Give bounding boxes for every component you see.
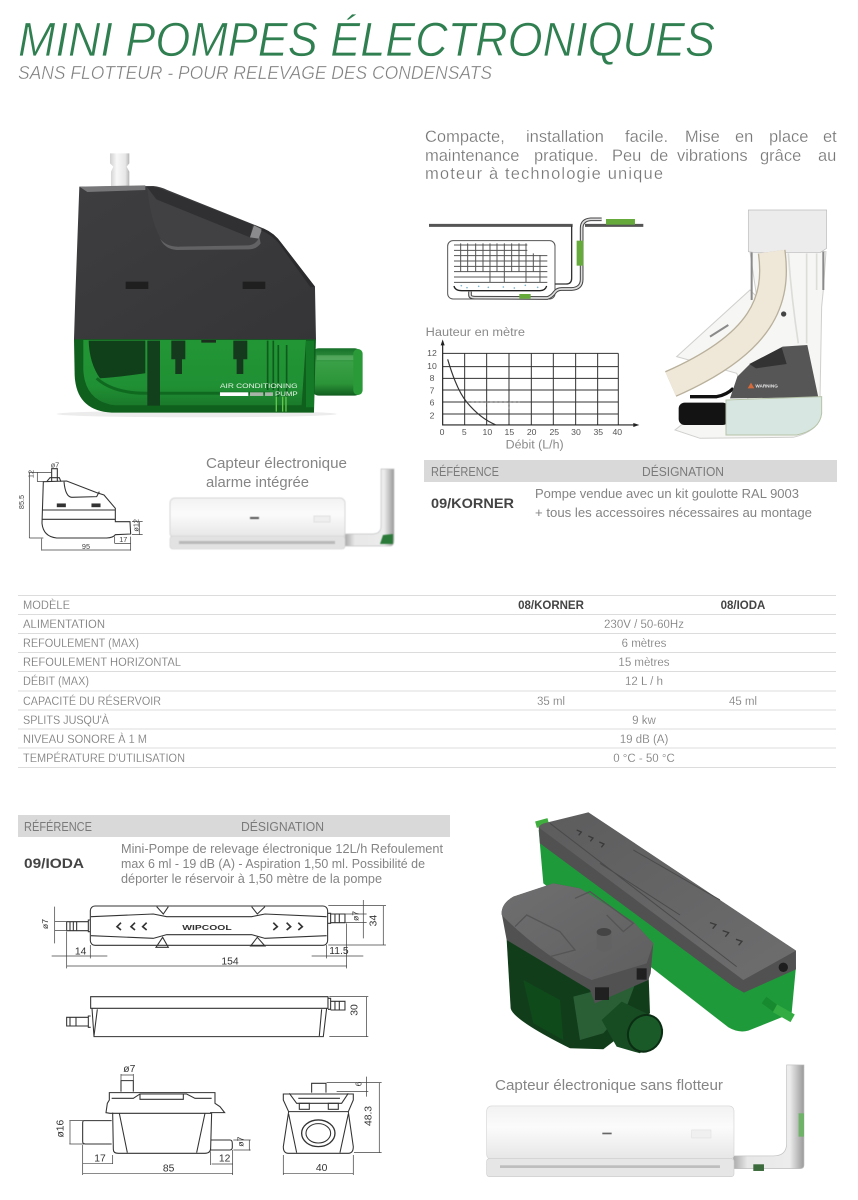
green joints — [753, 1113, 804, 1171]
row: niveau sonore — [23, 733, 668, 746]
x labels: 20 — [527, 427, 537, 437]
designation: Mini-Pompe de relevage électronique 12L/h Refoulement — [121, 842, 444, 856]
header labels: DÉSIGNATION — [241, 819, 324, 834]
end view dimensions — [283, 1077, 382, 1175]
x labels: 10 — [483, 427, 492, 437]
caption: capteur Korner — [206, 455, 347, 491]
front view values: ø7 — [235, 1136, 245, 1147]
front view values: 12 — [219, 1154, 231, 1165]
row: splits: SPLITS JUSQU'À — [23, 714, 109, 727]
intro text block: Peu — [612, 147, 641, 165]
product photo: Ioda pumps — [502, 812, 796, 1057]
row: capacité: 35 ml — [537, 696, 565, 708]
clips — [595, 987, 609, 1000]
intro text block: grâce — [760, 147, 801, 165]
intro text block: en — [735, 128, 753, 146]
pump lettering: PUMP — [275, 391, 298, 398]
y labels: 2 — [430, 411, 435, 421]
row: modèle: MODÈLE — [23, 599, 70, 612]
reference: 09/IODA — [24, 855, 84, 871]
dimension values: 95 — [82, 542, 90, 551]
chart title: Hauteur en mètre — [426, 325, 525, 339]
long green reservoir pump — [536, 812, 796, 1031]
row: alimentation — [23, 619, 684, 631]
technical drawings: Ioda — [40, 900, 386, 1175]
intro text block: facile. — [625, 128, 668, 146]
top view values: ø7 — [40, 919, 50, 929]
specifications table — [18, 596, 836, 768]
left nozzle — [536, 821, 548, 825]
designation: Pompe vendue avec un kit goulotte RAL 9003 — [535, 487, 799, 501]
row: refoulement max: REFOULEMENT (MAX) — [23, 638, 139, 650]
row: température — [23, 752, 675, 765]
header band — [18, 815, 450, 837]
top view dimensions — [52, 900, 386, 968]
header labels — [431, 464, 724, 479]
dimension values: ø12 — [132, 519, 141, 532]
white duct cover — [748, 210, 827, 253]
sensor — [380, 534, 393, 544]
caption: capteur Korner: Capteur électronique — [206, 455, 347, 472]
beige sleeve — [671, 252, 773, 384]
end view values — [316, 1081, 374, 1174]
top view values — [40, 911, 380, 968]
y labels — [427, 348, 437, 421]
ceiling — [429, 221, 643, 230]
photo: air conditioner Ioda — [487, 1065, 804, 1177]
center outlet — [597, 928, 612, 952]
pump housing: WARNING — [755, 384, 778, 389]
front view values: ø16 — [55, 1119, 66, 1138]
front view — [83, 1081, 232, 1153]
row: température: 0 °C - 50 °C — [613, 753, 675, 765]
x labels: 30 — [571, 427, 581, 437]
x labels: 5 — [462, 427, 467, 437]
pump lettering — [220, 383, 298, 398]
row: débit: 12 L / h — [625, 676, 663, 688]
intro text block — [425, 128, 837, 183]
intro text block: de — [650, 147, 668, 165]
dimension lines — [29, 472, 143, 551]
x labels: 25 — [549, 427, 559, 437]
row: niveau sonore: 19 dB (A) — [620, 734, 668, 746]
row: splits: 9 kw — [632, 715, 657, 727]
outlet — [602, 1002, 663, 1053]
end view values: 48.3 — [363, 1106, 374, 1126]
axes — [441, 339, 639, 427]
unit — [170, 498, 345, 538]
intro text block: au — [818, 147, 836, 165]
long pump lid — [539, 812, 796, 993]
row: refoulement horizontal — [23, 657, 670, 669]
front view values: ø7 — [123, 1064, 136, 1075]
dimension values: 12 — [26, 470, 35, 478]
front view values: 85 — [163, 1163, 175, 1174]
green pump markers — [519, 219, 635, 299]
y labels: 7 — [430, 385, 435, 395]
row: température: TEMPÉRATURE D'UTILISATION — [23, 752, 185, 765]
intro text block: installation — [526, 128, 604, 146]
dimension drawing: Korner — [17, 460, 143, 551]
row: modèle: 08/IODA — [721, 600, 765, 612]
Korner reference table — [424, 460, 837, 520]
flow chart — [426, 325, 639, 452]
header labels: DÉSIGNATION — [642, 464, 724, 479]
row: refoulement max — [23, 638, 667, 650]
curve — [448, 359, 496, 425]
intro text block: et — [823, 128, 837, 146]
row: capacité: 45 ml — [729, 696, 757, 708]
row: capacité: CAPACITÉ DU RÉSERVOIR — [23, 695, 161, 708]
x labels: 15 — [505, 427, 514, 437]
row: modèle — [23, 599, 765, 612]
dashed reference — [467, 402, 520, 409]
dimension values: ø7 — [51, 460, 59, 469]
housing — [74, 186, 316, 339]
pipes — [470, 219, 602, 298]
side view — [67, 997, 345, 1037]
intro text block: pratique. — [534, 147, 598, 165]
compact pump — [502, 883, 668, 1057]
photo: air conditioner Korner — [170, 469, 394, 549]
title: MINI POMPES ÉLECTRONIQUES — [18, 14, 715, 67]
top view values: 34 — [369, 915, 380, 926]
outline — [42, 469, 131, 538]
top view values: 11.5 — [329, 946, 349, 957]
indoor unit coil — [448, 241, 555, 299]
Ioda reference table — [18, 815, 450, 886]
designation — [535, 487, 812, 520]
row: refoulement horizontal: REFOULEMENT HORIZONTAL — [23, 657, 182, 669]
end view — [283, 1083, 353, 1153]
front view dimensions — [69, 1074, 251, 1175]
row: alimentation: ALIMENTATION — [23, 619, 105, 631]
intro text block: moteur à technologie unique — [425, 165, 663, 183]
row: niveau sonore: NIVEAU SONORE À 1 M — [23, 733, 147, 746]
caption: capteur Korner: alarme intégrée — [206, 474, 309, 491]
installation diagram — [429, 219, 643, 299]
designation: déporter le réservoir à 1,50 mètre de la pompe — [121, 872, 382, 886]
photo: pump installed in duct — [671, 210, 827, 438]
product photo: Korner pump — [57, 153, 363, 417]
intro text block: maintenance — [425, 147, 519, 165]
y labels: 10 — [427, 361, 437, 371]
green reservoir — [74, 339, 316, 413]
dimension values: 85.5 — [17, 495, 26, 509]
pump housing — [730, 345, 818, 398]
x axis title: Débit (L/h) — [506, 438, 564, 452]
right nozzle — [764, 1000, 793, 1018]
x labels: 35 — [593, 427, 603, 437]
row: refoulement max: 6 mètres — [622, 638, 667, 650]
row: alimentation: 230V / 50-60Hz — [604, 619, 684, 631]
pump lettering: AIR CONDITIONING — [220, 383, 298, 390]
header band — [424, 460, 837, 482]
pipe — [733, 1065, 804, 1169]
row: refoulement horizontal: 15 mètres — [618, 657, 670, 669]
nozzle — [110, 153, 129, 189]
x labels: 0 — [440, 427, 445, 437]
transparent reservoir — [726, 397, 822, 435]
lid — [502, 883, 653, 1003]
caption: capteur Ioda: Capteur électronique sans flotteur — [495, 1077, 723, 1094]
end view values: 6 — [353, 1081, 363, 1086]
top view — [67, 906, 345, 947]
tray — [675, 252, 826, 438]
top view values: ø7 — [351, 911, 361, 921]
slots — [126, 282, 265, 289]
housing bevels — [79, 185, 315, 287]
front view values: 17 — [94, 1154, 106, 1165]
y labels: 6 — [430, 397, 435, 407]
top view: WIPCOOL — [182, 923, 232, 932]
header labels: RÉFÉRENCE — [431, 464, 499, 479]
chevrons — [577, 830, 742, 945]
designation: + tous les accessoires nécessaires au montage — [535, 506, 812, 520]
outlet tube — [312, 348, 363, 396]
end view values: 40 — [316, 1163, 328, 1174]
intro text block: Mise — [685, 128, 720, 146]
intro text block: vibrations — [677, 147, 748, 165]
grid — [443, 353, 618, 425]
dimension values: 17 — [119, 535, 127, 544]
header labels — [24, 819, 324, 834]
x labels: 40 — [612, 427, 622, 437]
x labels — [440, 427, 622, 437]
reference: 09/KORNER — [431, 495, 514, 511]
y labels: 12 — [427, 348, 437, 358]
side view dimension — [329, 997, 368, 1037]
intro text block: place — [769, 128, 808, 146]
row: modèle: 08/KORNER — [518, 600, 585, 612]
row: débit: DÉBIT (MAX) — [23, 675, 89, 688]
row: splits — [23, 714, 657, 727]
dimension values — [17, 460, 141, 551]
intro text block: Compacte, — [425, 128, 505, 146]
y labels: 8 — [430, 373, 435, 383]
outlet hose — [679, 388, 733, 425]
unit — [487, 1106, 734, 1159]
header labels: RÉFÉRENCE — [24, 819, 92, 834]
row: débit — [23, 675, 663, 688]
top view values: 154 — [221, 957, 239, 968]
row: capacité — [23, 695, 757, 708]
subtitle: SANS FLOTTEUR - POUR RELEVAGE DES CONDENSATS — [18, 63, 492, 83]
front view values — [55, 1064, 245, 1174]
top view values: 14 — [75, 947, 87, 958]
designation: max 6 ml - 19 dB (A) - Aspiration 1,50 ml. Possibilité de — [121, 857, 425, 871]
pipe — [345, 469, 394, 546]
side view value: 30 — [349, 1004, 360, 1016]
designation — [121, 842, 444, 886]
